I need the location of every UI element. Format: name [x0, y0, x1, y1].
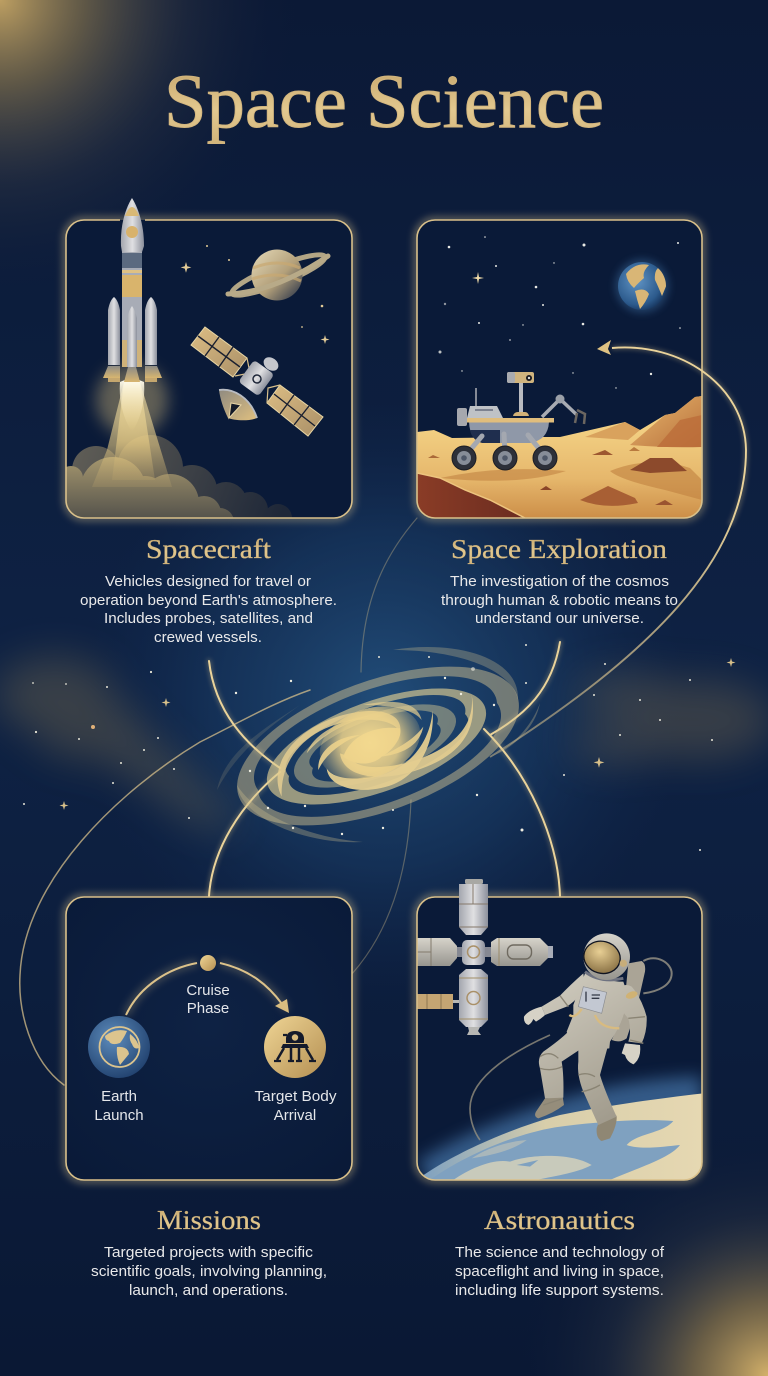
rover: [452, 372, 585, 470]
outer crescents: [217, 647, 540, 842]
text: spacecraft description: [80, 573, 337, 646]
tether and cable: [470, 958, 672, 1140]
heading: astronautics: Astronautics: [484, 1205, 635, 1235]
label: earth launch: Launch: [94, 1107, 144, 1124]
inner spiral arms: [278, 695, 473, 797]
helmet knob: [620, 960, 627, 967]
card frame: astronautics: [417, 897, 702, 1180]
text: spacecraft description: Includes probes, satellites, and: [104, 610, 313, 627]
card frame: missions: [66, 897, 352, 1180]
card frame: exploration: [417, 220, 702, 518]
label: cruise phase: Phase: [187, 1000, 229, 1017]
arc: launch to cruise: [126, 963, 197, 1015]
text: missions description: [91, 1244, 327, 1299]
glow of connectors: [209, 642, 560, 896]
text: spacecraft description: Vehicles designed for travel or: [105, 573, 311, 590]
satellite: [191, 327, 323, 436]
faint connector lines: [330, 518, 417, 995]
heading: spacecraft: Spacecraft: [146, 534, 272, 564]
space station: [417, 879, 553, 1035]
label: target body arrival: [254, 1088, 337, 1124]
collar: [585, 972, 623, 980]
nebula: right: [570, 673, 768, 763]
cruise point: [200, 955, 216, 971]
text: spacecraft description: operation beyond Earth's atmosphere.: [80, 592, 337, 609]
cruise arc glow: [126, 963, 287, 1015]
card frame: spacecraft: [66, 220, 352, 518]
panel: missions diagram: [66, 897, 352, 1180]
text: missions description: scientific goals, involving planning,: [91, 1263, 327, 1280]
connector lines: [20, 518, 560, 1085]
chest pack: [578, 987, 607, 1013]
title: Space Science: [164, 60, 604, 144]
panel: spacecraft illustration: [57, 198, 352, 536]
label: target body arrival: Target Body: [254, 1088, 337, 1105]
label: earth launch: [94, 1088, 144, 1124]
text: exploration description: The investigation of the cosmos: [450, 573, 669, 590]
background stars: [23, 644, 736, 851]
heading: space exploration: Space Exploration: [451, 534, 668, 564]
text: astronautics description: including life support systems.: [455, 1282, 664, 1299]
shoulder patch: [625, 990, 638, 1000]
text: missions description: Targeted projects with specific: [104, 1244, 314, 1261]
exploration connector: [490, 642, 560, 735]
missions connector: [209, 772, 280, 896]
helmet: [583, 933, 630, 980]
icon: lander: [264, 1016, 326, 1078]
text: missions description: launch, and operations.: [129, 1282, 288, 1299]
outer band: [237, 667, 519, 825]
galaxy: [217, 647, 540, 842]
star field: [438, 236, 681, 389]
left long arc: [20, 690, 310, 1085]
text: spacecraft description: crewed vessels.: [154, 629, 262, 646]
label: earth launch: Earth: [101, 1088, 137, 1105]
rocket: [103, 198, 162, 382]
earth globe: [615, 259, 669, 313]
cloud of rocket exhaust: [66, 435, 292, 518]
planet surface: [417, 1093, 703, 1180]
suit joint lines: [540, 996, 645, 1105]
trajectory arc with arrow: [490, 340, 746, 757]
label: cruise phase: Cruise: [186, 982, 230, 999]
text: exploration description: understand our universe.: [475, 610, 644, 627]
text: astronautics description: [455, 1244, 665, 1299]
arrow head: [275, 999, 289, 1013]
gold trims: [569, 1009, 619, 1028]
astronautics connector: [484, 729, 560, 896]
galaxy core: [310, 693, 430, 793]
spacecraft connector: [209, 661, 280, 768]
visor: [580, 937, 624, 978]
suit body: [535, 973, 647, 1141]
stars in spacecraft card: [181, 245, 330, 344]
exhaust plume: [92, 364, 172, 487]
middle band: [267, 689, 486, 804]
heading: missions: Missions: [157, 1205, 261, 1235]
planet: saturn: [228, 248, 328, 302]
mars ground: [417, 396, 702, 518]
panel: space exploration illustration: [417, 220, 702, 518]
text: exploration description: [441, 573, 678, 627]
arc: cruise to arrival: [220, 963, 282, 1004]
chest icon: [586, 992, 600, 1002]
text: exploration description: through human & robotic means to: [441, 592, 678, 609]
label: cruise phase: [186, 982, 230, 1017]
backpack: [612, 961, 645, 1041]
astronaut: [470, 933, 672, 1141]
panel: astronautics illustration: [417, 879, 703, 1180]
label: target body arrival: Arrival: [274, 1107, 316, 1124]
text: astronautics description: spaceflight and living in space,: [455, 1263, 664, 1280]
third band: [294, 704, 456, 788]
card border: astronautics: [417, 897, 702, 1180]
nebula: left: [0, 657, 241, 839]
text: astronautics description: The science and technology of: [455, 1244, 665, 1261]
icon: earth: [88, 1016, 150, 1078]
gloves: [524, 1007, 640, 1064]
galaxy stars: [235, 667, 524, 835]
card border: exploration: [417, 220, 702, 518]
card border: spacecraft: [66, 220, 352, 518]
